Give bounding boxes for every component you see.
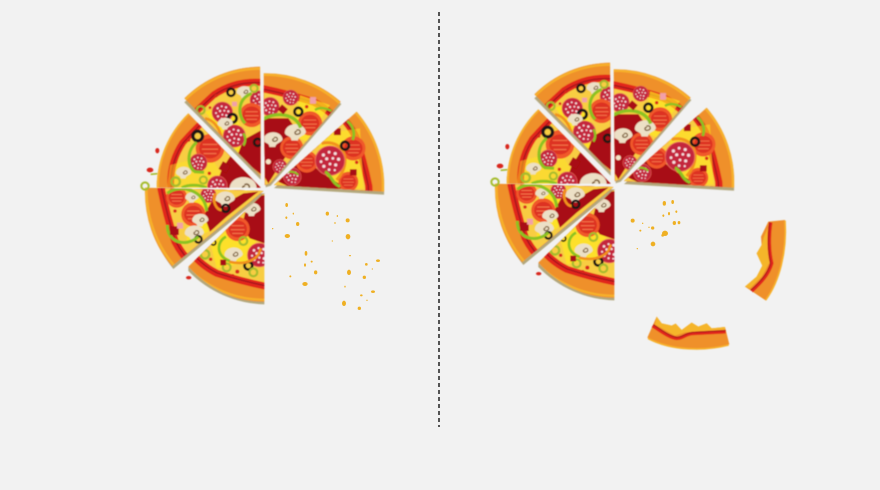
- slice: lower left: [144, 182, 616, 270]
- slice: upper left: [156, 108, 612, 188]
- dashed divider: [438, 12, 440, 427]
- left pizza crumbs: [272, 203, 380, 310]
- slice: bottom: [154, 82, 374, 304]
- right pizza crumbs: [631, 200, 680, 249]
- eaten crust: bottom piece: [647, 317, 729, 349]
- slice: right: [274, 107, 735, 196]
- scattered toppings: [141, 148, 191, 279]
- left pizza with two slices missing: [141, 67, 385, 309]
- slice: upper right middle: [151, 73, 379, 301]
- slice: upper left middle: [152, 67, 370, 285]
- right pizza: [491, 63, 735, 305]
- infographic canvas: [140, 12, 787, 427]
- eaten crust: right piece: [745, 220, 786, 301]
